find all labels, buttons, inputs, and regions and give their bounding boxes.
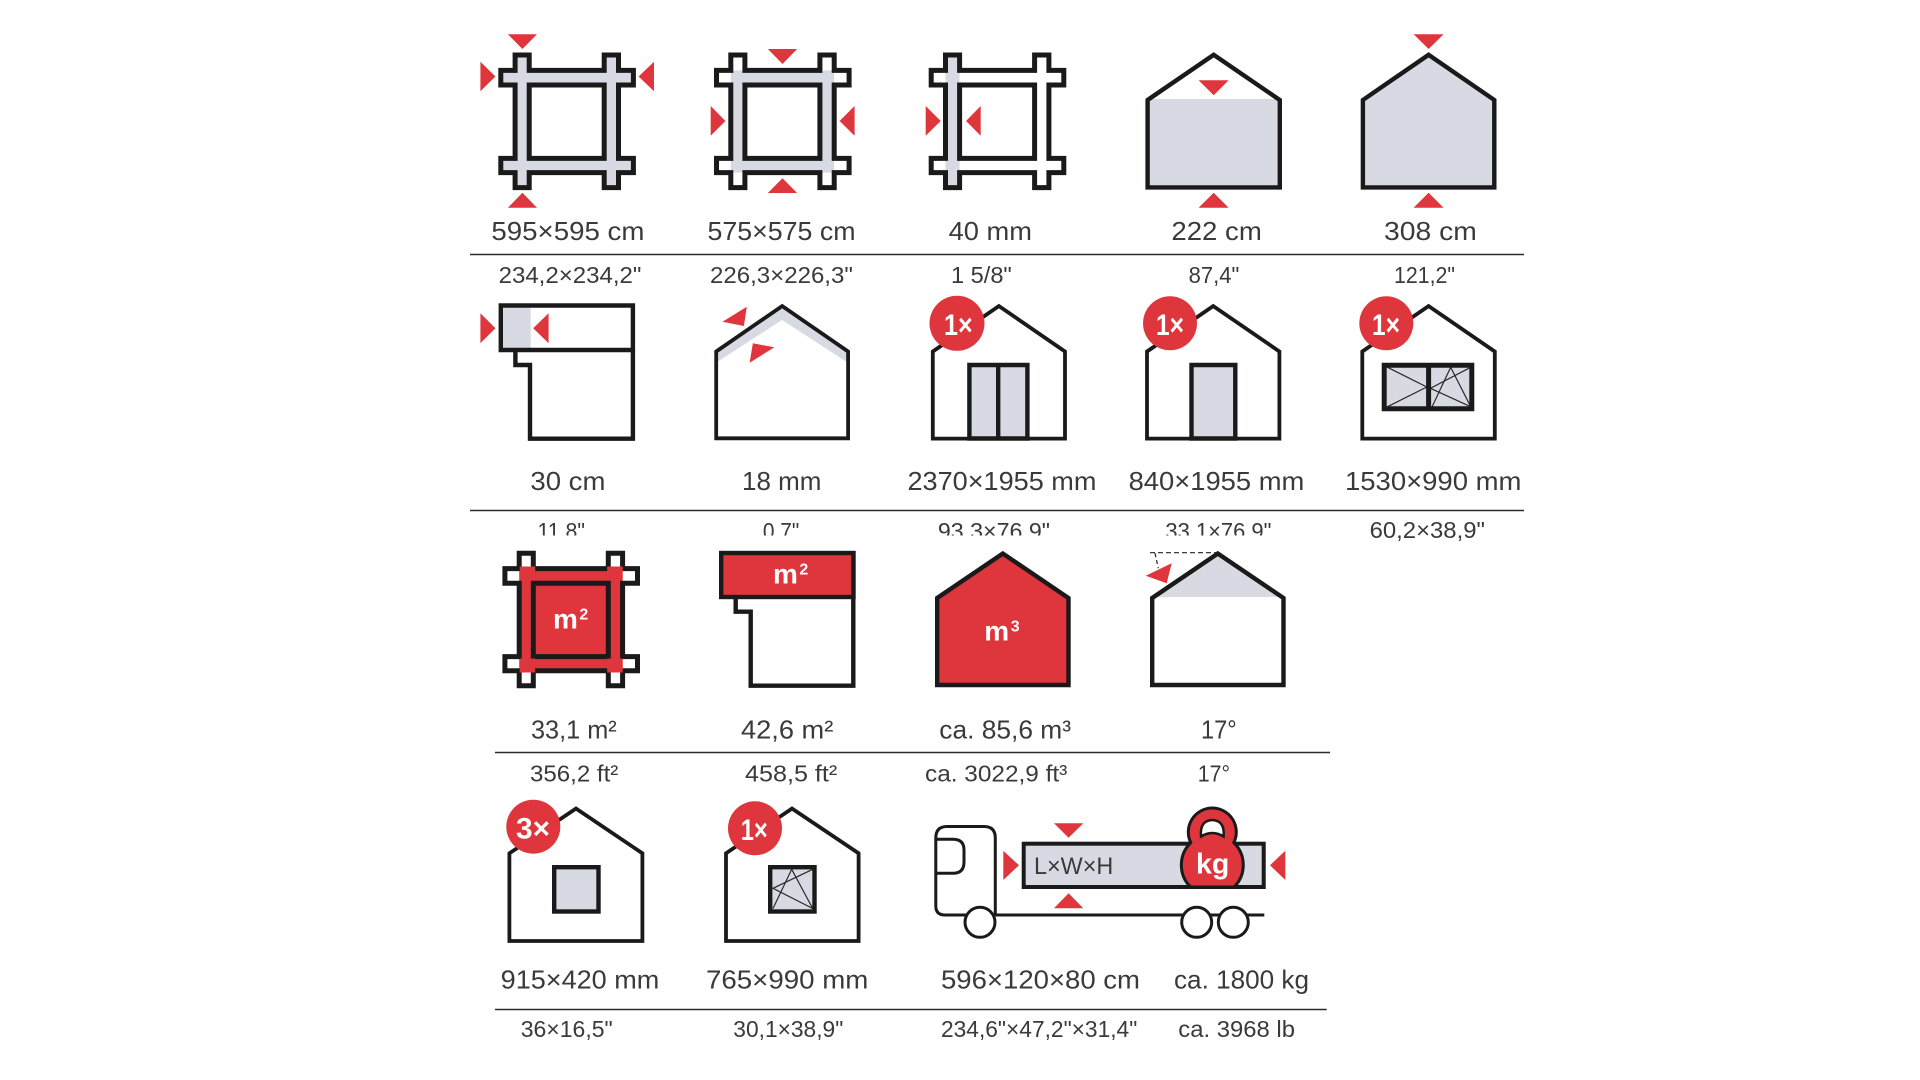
icon: roof thickness 18 mm (716, 305, 848, 438)
row 2 primary values: 30 cm (530, 466, 605, 496)
row 2 primary values: 1530×990 mm (1345, 466, 1521, 496)
icon: log frame outer size 595x595 (480, 34, 654, 208)
icon: house with small window and 3x badge: 3× (516, 812, 550, 845)
row 4 imperial values: ca. 3968 lb (1178, 1016, 1295, 1042)
row 1 primary values: 40 mm (949, 216, 1032, 246)
row 4 primary values (501, 964, 1309, 994)
row 3 imperial values (530, 761, 1230, 787)
icon: house with double door and badge: 1× (944, 309, 973, 342)
icon: house with small window and 3x badge (506, 800, 642, 941)
row 2 primary values (530, 466, 1521, 496)
icon: volume ca. 85,6 m3 (937, 554, 1068, 685)
icon: floor area 33,1 m2: 2 (579, 606, 588, 623)
row 2 imperial values: 60,2×38,9" (1370, 517, 1485, 543)
icon: roof pitch 17 degrees (1146, 553, 1284, 685)
icon: house with double window and badge: 1× (1372, 309, 1400, 342)
kettlebell weight: kg (1196, 848, 1229, 880)
icon: house with tilt window and 1x badge (726, 801, 859, 941)
icon: floor area 33,1 m2 (505, 553, 638, 686)
row 2 imperial values: 33,1×76,9" (1165, 518, 1271, 544)
icon: house with single door and badge: 1× (1156, 309, 1184, 342)
row 2 imperial values: 0,7" (763, 518, 799, 544)
row 4 imperial values: 36×16,5" (521, 1016, 613, 1042)
row 2 imperial values: 11,8" (538, 518, 585, 544)
icon: house with tilt window and 1x badge: 1× (741, 814, 768, 847)
icon: floor area 33,1 m2: m (553, 603, 578, 634)
row 1 imperial values (499, 262, 1455, 288)
row 1 primary values: 308 cm (1384, 216, 1477, 246)
icon: house total height 308 cm (1363, 34, 1494, 208)
icon: log frame inner size 575x575 (711, 49, 855, 193)
icon: house with single door and badge (1143, 296, 1279, 439)
row 1 primary values (491, 216, 1477, 246)
row 1 imperial values: 226,3×226,3" (710, 262, 853, 288)
icon: house wall height 222 cm (1148, 55, 1280, 208)
row 4 imperial values: 30,1×38,9" (733, 1016, 843, 1042)
row 1 imperial values: 87,4" (1189, 262, 1239, 288)
cargo dimension arrows (1003, 823, 1285, 908)
row 1 primary values: 575×575 cm (708, 216, 856, 246)
row 1 primary values: 595×595 cm (491, 216, 644, 246)
row 3 primary values: ca. 85,6 m³ (939, 715, 1071, 745)
row 4 primary values: 915×420 mm (501, 964, 659, 994)
icon: volume ca. 85,6 m3: 3 (1011, 619, 1020, 636)
row 3 imperial values: ca. 3022,9 ft³ (925, 761, 1067, 787)
icon: delivery truck with cargo and kettlebell weight (936, 808, 1285, 937)
kettlebell weight (1181, 808, 1243, 887)
icon: total area 42,6 m2: 2 (799, 561, 808, 578)
row 4 imperial values: 234,6"×47,2"×31,4" (941, 1016, 1137, 1042)
row 2 imperial values: 93,3×76,9" (938, 518, 1050, 544)
icon: total area 42,6 m2 (721, 553, 854, 686)
row 3 primary values: 42,6 m² (741, 715, 834, 745)
row 2 primary values: 18 mm (742, 466, 821, 496)
cargo box (1024, 844, 1264, 887)
row 2 primary values: 2370×1955 mm (908, 466, 1096, 496)
row 3 imperial values: 17° (1198, 761, 1230, 787)
icon: house with double door and badge (930, 296, 1065, 439)
row 4 primary values: 596×120×80 cm (941, 964, 1140, 994)
truck cab and chassis (936, 826, 1264, 937)
row 3 imperial values: 458,5 ft² (745, 761, 837, 787)
icon: roof overhang 30 cm (480, 306, 633, 439)
row 3 imperial values: 356,2 ft² (530, 761, 618, 787)
row 4 primary values: ca. 1800 kg (1174, 964, 1309, 994)
icon: log frame wall thickness 40 mm (926, 55, 1064, 188)
row 1 imperial values: 121,2" (1394, 262, 1455, 288)
icon: volume ca. 85,6 m3: m (984, 616, 1009, 647)
row 3 primary values: 33,1 m² (531, 715, 617, 745)
icon: house with double window and badge (1359, 296, 1495, 439)
cargo dimensions label: L×W×H (1034, 853, 1113, 880)
row 4 primary values: 765×990 mm (706, 964, 868, 994)
row 1 imperial values: 234,2×234,2" (499, 262, 641, 288)
icon: total area 42,6 m2: m (773, 558, 798, 589)
row 1 imperial values: 1 5/8" (951, 262, 1012, 288)
row 4 imperial values (521, 1016, 1295, 1042)
row 1 primary values: 222 cm (1171, 216, 1262, 246)
row 2 imperial values (500, 517, 1485, 546)
row 3 primary values: 17° (1201, 715, 1237, 745)
row 2 primary values: 840×1955 mm (1129, 466, 1304, 496)
row 3 primary values (531, 715, 1237, 745)
